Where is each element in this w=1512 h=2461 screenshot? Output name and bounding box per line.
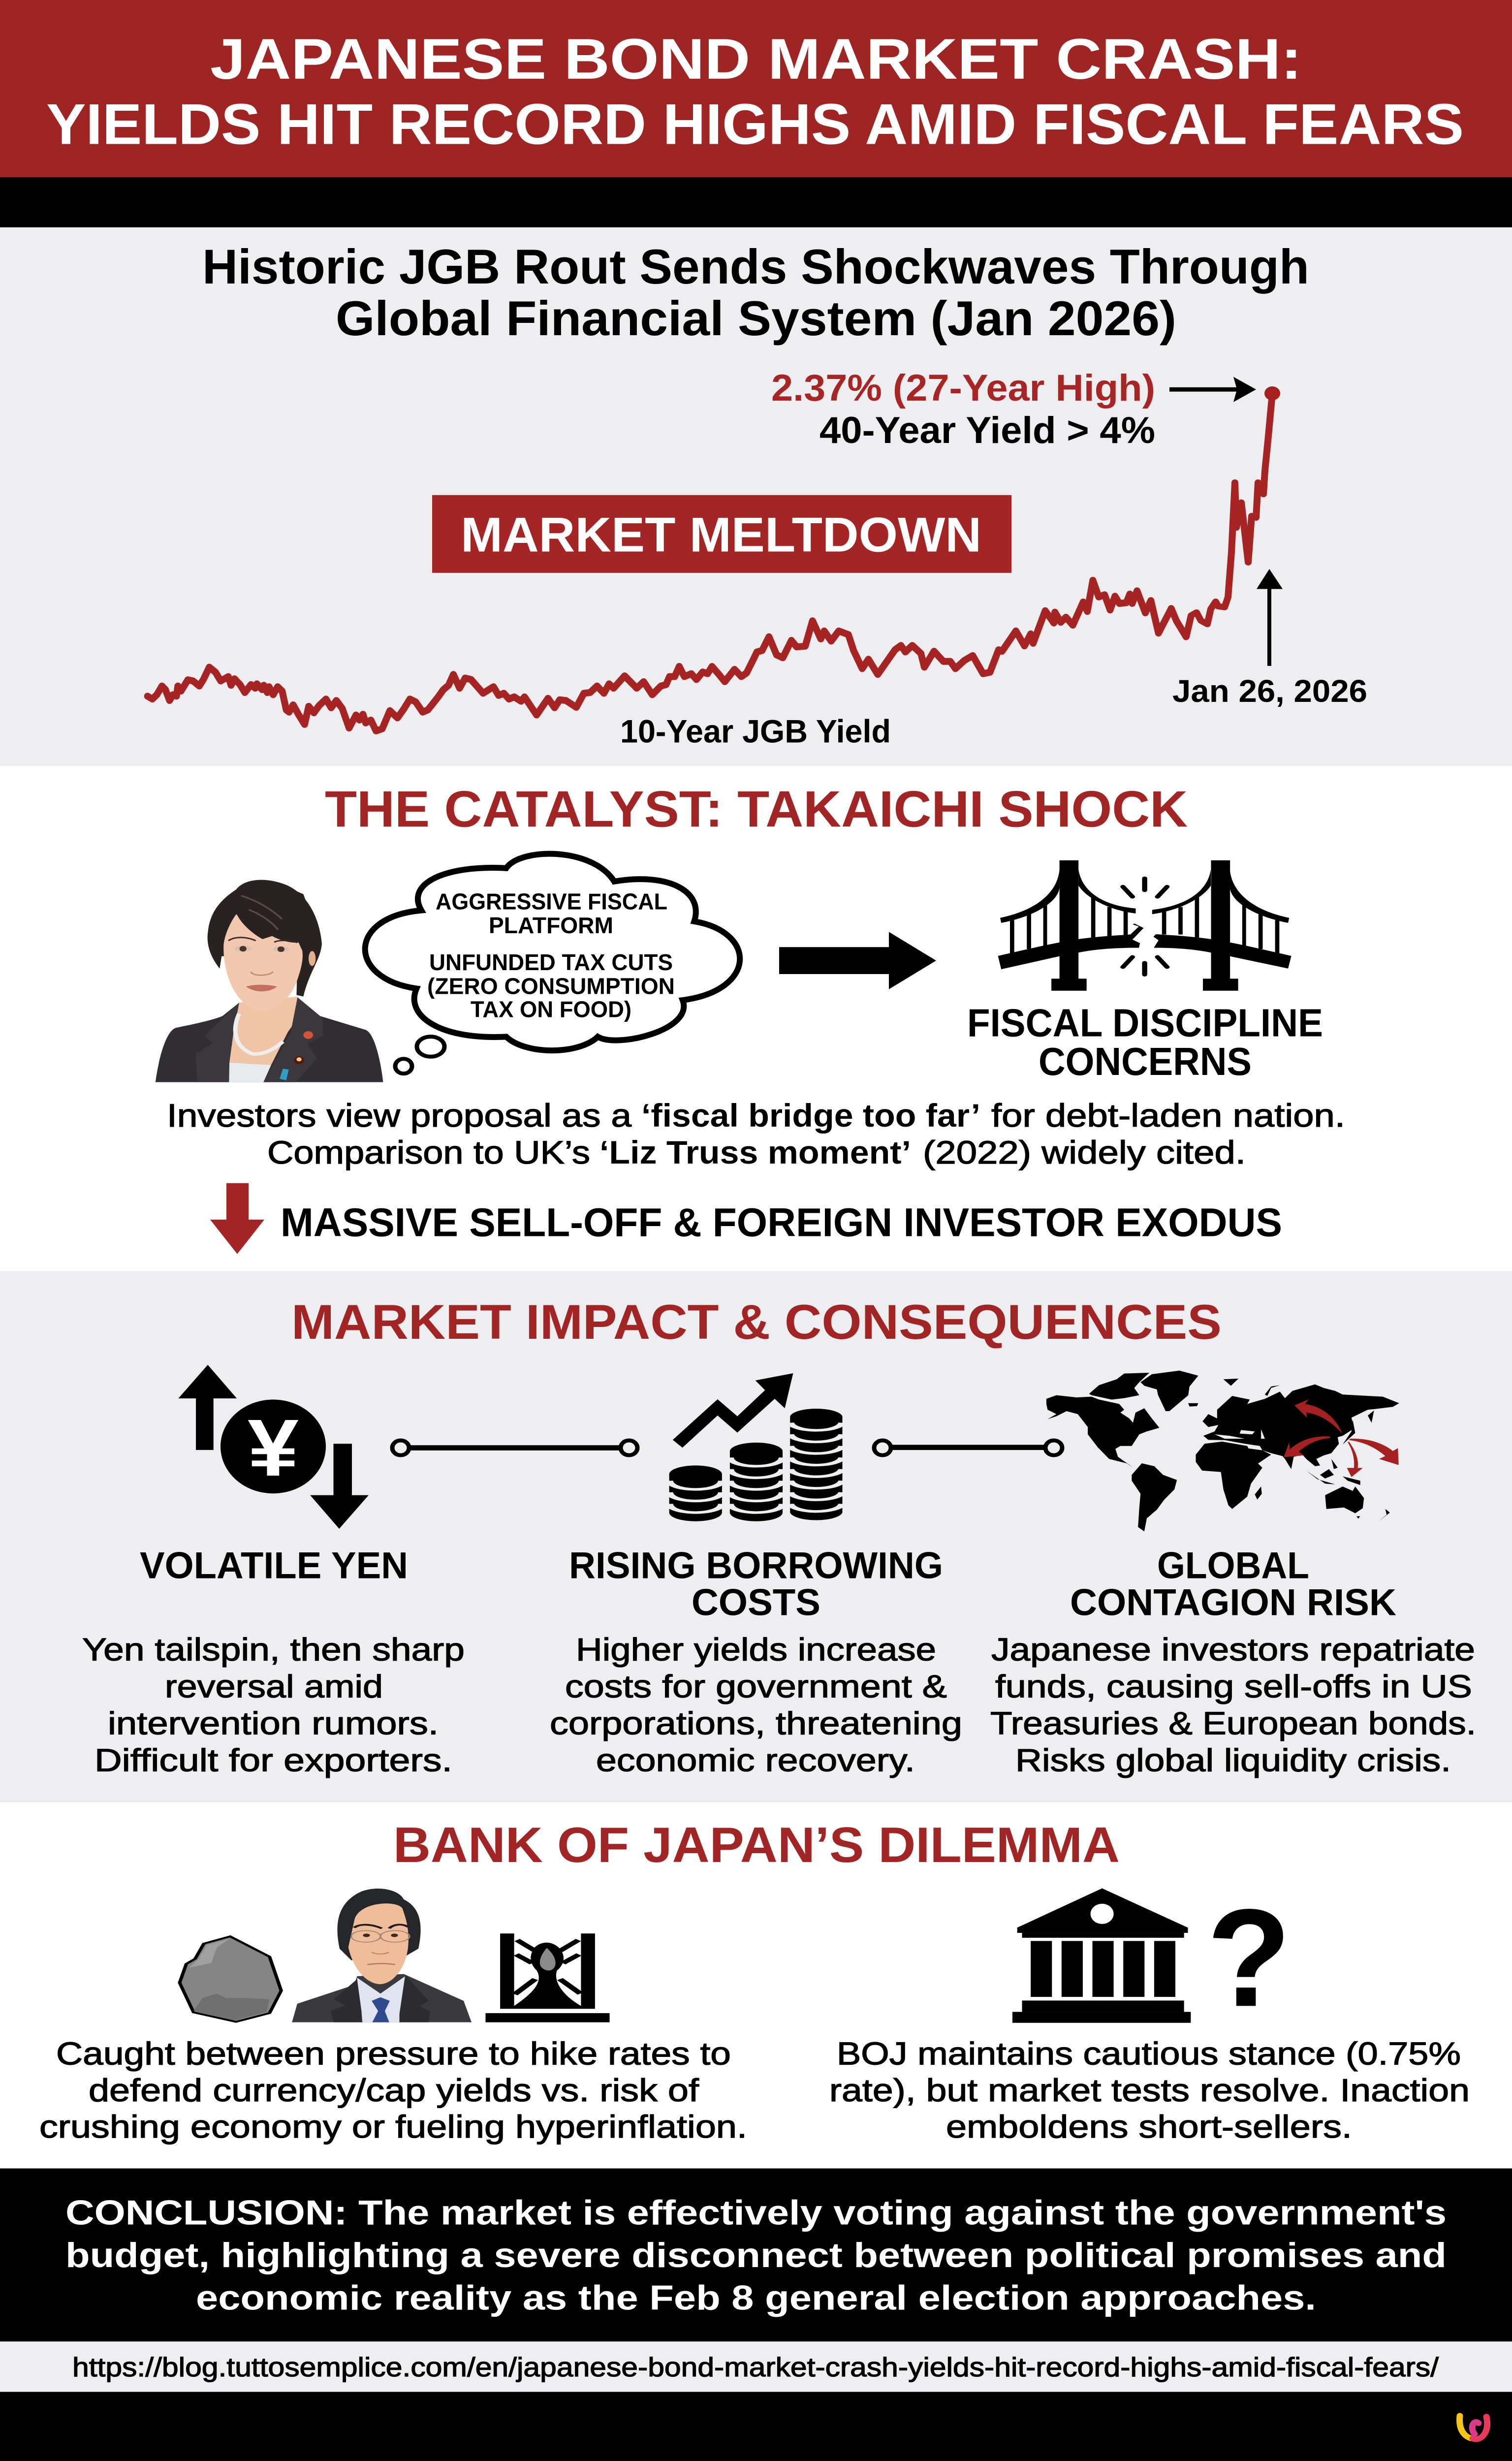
- connector: costs to contagion: [874, 1441, 1062, 1455]
- text: dilemma left: [39, 2036, 747, 2145]
- body: costs: economic recovery.: [596, 1742, 915, 1778]
- icon: broken bridge: [998, 860, 1292, 991]
- body: yen: [82, 1631, 465, 1778]
- explanatory text: (2022) widely cited.: [923, 1134, 1246, 1170]
- line chart: 10-year JGB yield: [148, 393, 1272, 731]
- url text: https://blog.tuttosemplice.com/en/japanese-bond-market-crash-yields-hit-record-highs-amid-fiscal-fears/: [72, 2352, 1439, 2382]
- text: dilemma right: BOJ maintains cautious stance (0.75%: [837, 2036, 1461, 2072]
- date label: Jan 26, 2026: [1172, 673, 1367, 709]
- body: contagion: Risks global liquidity crisis.: [1015, 1742, 1451, 1778]
- icon: central bank with question mark: ?: [1207, 1880, 1291, 2035]
- panel: the catalyst: [0, 766, 1512, 1272]
- thought bubble: [365, 854, 740, 1073]
- peak marker: [1264, 386, 1280, 400]
- panel: yield chart: [0, 227, 1512, 766]
- text: dilemma left: crushing economy or fueling hyperinflation.: [39, 2109, 747, 2145]
- icon: volatile yen: ¥: [248, 1403, 299, 1493]
- panel: market impact: [0, 1272, 1512, 1801]
- conclusion text: CONCLUSION: The market is effectively voting against the government's: [65, 2193, 1447, 2232]
- text: dilemma right: [829, 2036, 1470, 2145]
- arrow: sell-off: [210, 1183, 264, 1254]
- footer band: [0, 2392, 1512, 2461]
- panel: conclusion: [0, 2169, 1512, 2341]
- text: dilemma left: Caught between pressure to hike rates to: [56, 2036, 731, 2072]
- body: contagion: funds, causing sell-offs in US: [995, 1668, 1472, 1704]
- bubble text: fiscal platform: [436, 889, 667, 938]
- body: yen: Yen tailspin, then sharp: [82, 1631, 465, 1667]
- subtitle: [202, 239, 1309, 346]
- panel: BOJ dilemma: [0, 1801, 1512, 2169]
- title line 1: JAPANESE BOND MARKET CRASH:: [210, 27, 1302, 91]
- arrow: date marker: [1257, 569, 1283, 666]
- icon: rock: [180, 1936, 281, 2022]
- dilemma heading: BANK OF JAPAN’S DILEMMA: [393, 1817, 1120, 1873]
- bubble text: tax cuts: (ZERO CONSUMPTION: [427, 974, 675, 999]
- body: costs: [550, 1631, 962, 1778]
- panel: title banner: [0, 0, 1512, 177]
- catalyst heading: THE CATALYST: TAKAICHI SHOCK: [325, 780, 1188, 838]
- column: global contagion risk: [990, 1545, 1476, 1778]
- body: contagion: [990, 1631, 1476, 1778]
- arrow: cause to effect: [779, 932, 936, 989]
- subtitle: Historic JGB Rout Sends Shockwaves Through: [202, 239, 1309, 294]
- small thought circles: [395, 1037, 444, 1073]
- impact heading: MARKET IMPACT & CONSEQUENCES: [291, 1295, 1222, 1349]
- badge: market meltdown: [432, 495, 1011, 573]
- explanatory text: Comparison to UK’s: [267, 1134, 590, 1170]
- label: fiscal discipline concerns: FISCAL DISCIPLINE: [967, 1001, 1323, 1044]
- conclusion text: [65, 2193, 1447, 2317]
- label: fiscal discipline concerns: CONCERNS: [1039, 1040, 1252, 1083]
- explanatory text: for debt-laden nation.: [991, 1097, 1345, 1134]
- bubble text: tax cuts: [427, 950, 675, 1022]
- sell-off statement: MASSIVE SELL-OFF & FOREIGN INVESTOR EXODUS: [281, 1200, 1282, 1245]
- conclusion text: economic reality as the Feb 8 general election approaches.: [196, 2278, 1316, 2317]
- icon: volatile yen: [178, 1365, 369, 1529]
- body: yen: reversal amid: [165, 1668, 383, 1704]
- icons: rock, governor, hard place: [180, 1889, 610, 2022]
- portrait: Takaichi: [156, 880, 383, 1082]
- column: volatile yen: VOLATILE YEN: [140, 1545, 408, 1586]
- body: yen: Difficult for exporters.: [94, 1742, 452, 1778]
- callout: peak yield: 2.37% (27-Year High): [771, 368, 1155, 409]
- bubble text: fiscal platform: AGGRESSIVE FISCAL: [436, 889, 667, 915]
- badge: market meltdown: MARKET MELTDOWN: [461, 507, 981, 562]
- column: volatile yen: [82, 1545, 465, 1778]
- icon: world map with capital flows: [1046, 1371, 1399, 1531]
- callout: 40-year yield: 40-Year Yield > 4%: [819, 410, 1155, 451]
- portrait: BOJ governor: [292, 1889, 472, 2022]
- icon: logo: [1460, 2416, 1487, 2439]
- icon: rising costs: [669, 1373, 842, 1521]
- bubble text: tax cuts: TAX ON FOOD): [471, 997, 631, 1022]
- conclusion text: budget, highlighting a severe disconnect between political promises and: [65, 2236, 1447, 2274]
- icon: central bank with question mark: [1012, 1880, 1291, 2035]
- black divider band: [0, 177, 1512, 227]
- column: rising borrowing costs: COSTS: [692, 1582, 820, 1623]
- icon: hard place: [485, 1933, 610, 2022]
- body: contagion: Japanese investors repatriate: [991, 1631, 1475, 1667]
- body: yen: intervention rumors.: [108, 1705, 439, 1741]
- text: dilemma right: rate), but market tests resolve. Inaction: [829, 2072, 1470, 2108]
- text: dilemma right: emboldens short-sellers.: [946, 2109, 1352, 2145]
- explanatory text: ‘Liz Truss moment’: [599, 1134, 911, 1170]
- column: rising borrowing costs: RISING BORROWING: [569, 1545, 943, 1586]
- bubble text: tax cuts: UNFUNDED TAX CUTS: [429, 950, 673, 975]
- body: costs: corporations, threatening: [550, 1705, 962, 1741]
- subtitle: Global Financial System (Jan 2026): [336, 291, 1176, 346]
- bubble text: fiscal platform: PLATFORM: [489, 914, 613, 938]
- column: global contagion risk: CONTAGION RISK: [1070, 1582, 1396, 1623]
- text: dilemma left: defend currency/cap yields vs. risk of: [89, 2072, 699, 2108]
- label: fiscal discipline concerns: [967, 1001, 1323, 1083]
- chart label: 10-Year JGB Yield: [620, 713, 891, 749]
- body: contagion: Treasuries & European bonds.: [990, 1705, 1476, 1741]
- arrow: to peak: [1169, 377, 1256, 402]
- column: global contagion risk: GLOBAL: [1157, 1545, 1309, 1586]
- body: costs: Higher yields increase: [576, 1631, 936, 1667]
- connector: yen to costs: [392, 1441, 637, 1455]
- explanatory text: [167, 1097, 1345, 1170]
- body: costs: costs for government &: [565, 1668, 947, 1704]
- explanatory text: ‘fiscal bridge too far’: [641, 1097, 980, 1134]
- column: rising borrowing costs: [550, 1545, 962, 1778]
- explanatory text: Investors view proposal as a: [167, 1097, 632, 1134]
- panel: source url: [0, 2341, 1512, 2392]
